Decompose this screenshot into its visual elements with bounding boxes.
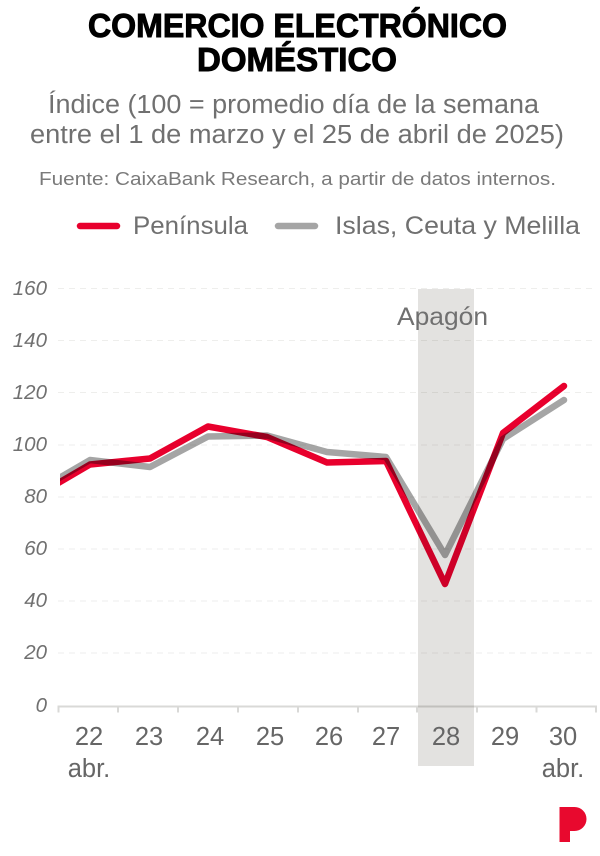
x axis labels: 25 (256, 723, 284, 751)
y axis labels: 40 (24, 589, 48, 612)
x axis labels: 28 (432, 723, 460, 751)
x axis labels: abr. (68, 755, 110, 783)
x axis labels: 29 (491, 723, 519, 751)
y axis labels: 160 (13, 277, 48, 300)
legend (80, 212, 580, 240)
legend item: Península: Península (133, 212, 248, 240)
x axis labels: 27 (372, 723, 400, 751)
y axis labels (13, 277, 48, 717)
shaded band: Apagón (418, 289, 474, 766)
title: COMERCIO ELECTRÓNICO (88, 7, 507, 45)
x axis labels: 30 (549, 723, 577, 751)
title (88, 7, 507, 79)
annotation: Apagón: Apagón (397, 303, 488, 331)
x axis labels: 26 (315, 723, 343, 751)
title: DOMÉSTICO (197, 41, 397, 79)
y axis labels: 120 (13, 381, 48, 404)
x axis labels (68, 723, 584, 783)
x axis labels: 23 (135, 723, 163, 751)
line: Península (57, 386, 564, 584)
icon: publisher logo (560, 807, 586, 842)
y axis labels: 20 (23, 641, 48, 664)
y axis labels: 80 (24, 485, 48, 508)
legend item: Islas, Ceuta y Melilla: Islas, Ceuta y Melilla (335, 212, 580, 240)
y axis labels: 140 (13, 329, 48, 352)
y axis labels: 100 (13, 433, 48, 456)
x axis labels: 22 (75, 723, 103, 751)
line: Islas, Ceuta y Melilla (57, 400, 564, 555)
source note: Fuente: CaixaBank Research, a partir de datos internos. (39, 168, 556, 189)
subtitle (30, 90, 564, 149)
x axis labels: 24 (196, 723, 224, 751)
chart gridlines (58, 288, 594, 653)
subtitle: Índice (100 = promedio día de la semana (48, 90, 540, 119)
x axis with ticks (58, 706, 596, 712)
y axis labels: 60 (24, 537, 48, 560)
subtitle: entre el 1 de marzo y el 25 de abril de 2025) (30, 121, 564, 149)
y axis labels: 0 (36, 694, 48, 717)
x axis labels: abr. (542, 755, 584, 783)
